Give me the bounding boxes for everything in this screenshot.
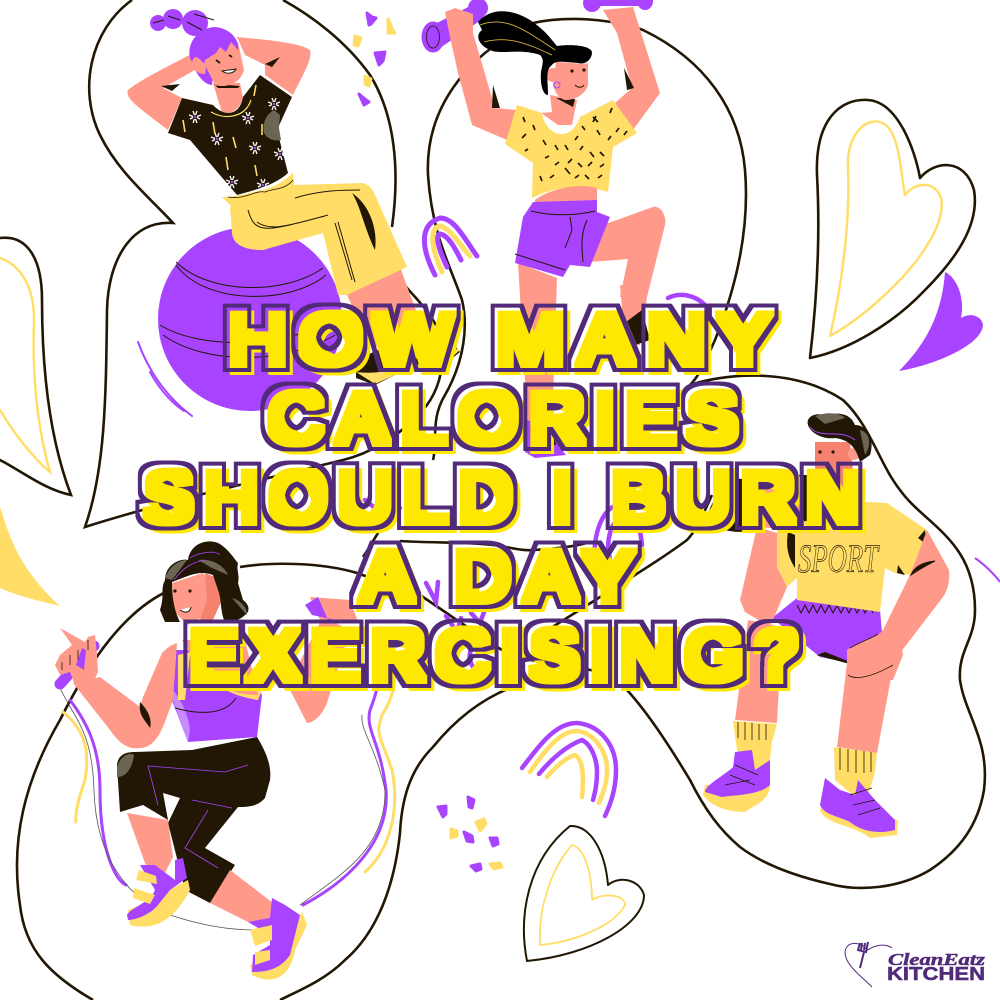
blob: top centre [428, 19, 746, 460]
hair [808, 414, 872, 462]
dumbbell left [422, 0, 488, 52]
lower legs and shoe [518, 263, 557, 430]
shirt [168, 75, 292, 195]
socks [733, 721, 777, 770]
sport lettering: SPORT [798, 536, 880, 581]
left arm [740, 527, 787, 627]
right arm [263, 617, 350, 723]
title line 5: EXERCISING? [186, 612, 807, 697]
trousers [117, 737, 270, 903]
head [172, 573, 217, 625]
hair behind neck [192, 60, 215, 85]
shoe right [820, 800, 898, 838]
shape: left yellow leaf [0, 507, 60, 606]
neck [820, 480, 860, 515]
mid crossing lines [363, 495, 712, 637]
t-shirt [777, 502, 927, 612]
trousers [230, 183, 407, 295]
arms [127, 52, 195, 130]
logo wordmark bottom: KITCHEN [887, 964, 985, 984]
hair and buns [189, 27, 238, 63]
head [203, 42, 244, 86]
blob: top left [85, 0, 442, 527]
heart: top right [810, 100, 975, 358]
blob: right [627, 376, 985, 888]
earrings [554, 82, 560, 88]
arms [445, 8, 518, 140]
left arm [73, 643, 177, 748]
rainbow: top centre [424, 218, 477, 275]
right arm [883, 530, 949, 657]
raised arm behind title [757, 480, 800, 530]
head [815, 442, 855, 495]
left hand and handle [60, 646, 94, 684]
shoe left [128, 880, 190, 927]
title [141, 296, 867, 697]
dark sleeve behind arm [705, 475, 808, 532]
neck [213, 83, 243, 114]
blob: bottom left [17, 564, 603, 1000]
logo heart and fork [845, 942, 892, 987]
lower legs [127, 813, 173, 883]
shoe right [250, 912, 307, 980]
title line 4: A DAY [355, 533, 643, 618]
hand on knee [847, 630, 903, 680]
torso purple [168, 650, 262, 742]
hair [478, 11, 592, 95]
motion lines near ball [138, 342, 192, 416]
rainbow: bottom centre [522, 723, 616, 816]
figure: woman with dumbbells [422, 0, 665, 458]
confetti: top [354, 13, 395, 105]
rainbow: behind title [365, 295, 705, 667]
heart: far left [0, 238, 71, 495]
shoe left [703, 785, 770, 812]
hair [160, 541, 249, 622]
waist frill [222, 173, 294, 207]
legs [735, 620, 782, 723]
logo: Clean Eatz Kitchen [845, 942, 985, 987]
midriff [535, 186, 597, 205]
right hand and handle [310, 597, 358, 622]
heart: bottom [524, 826, 644, 961]
waistband [797, 605, 873, 613]
figure: woman with jump rope [55, 541, 395, 980]
confetti: bottom [438, 797, 502, 871]
head [553, 62, 588, 100]
lower leg and shoe [347, 267, 425, 350]
figure: man sitting [703, 413, 1000, 838]
shorts [772, 598, 882, 663]
exercise ball [158, 227, 342, 411]
neck [541, 95, 577, 125]
title line 2: CALORIES [265, 375, 746, 460]
logo wordmark top: CleanEatz [888, 950, 985, 969]
shorts [515, 200, 610, 277]
crop top [505, 100, 637, 198]
jump rope [60, 650, 395, 930]
figure: woman on exercise ball [127, 9, 460, 411]
dumbbell right [583, 0, 653, 12]
title line 1: HOW MANY [225, 296, 780, 381]
heart: solid purple [899, 272, 983, 371]
title line 3: SHOULD I BURN [141, 454, 867, 539]
thigh [590, 207, 665, 297]
